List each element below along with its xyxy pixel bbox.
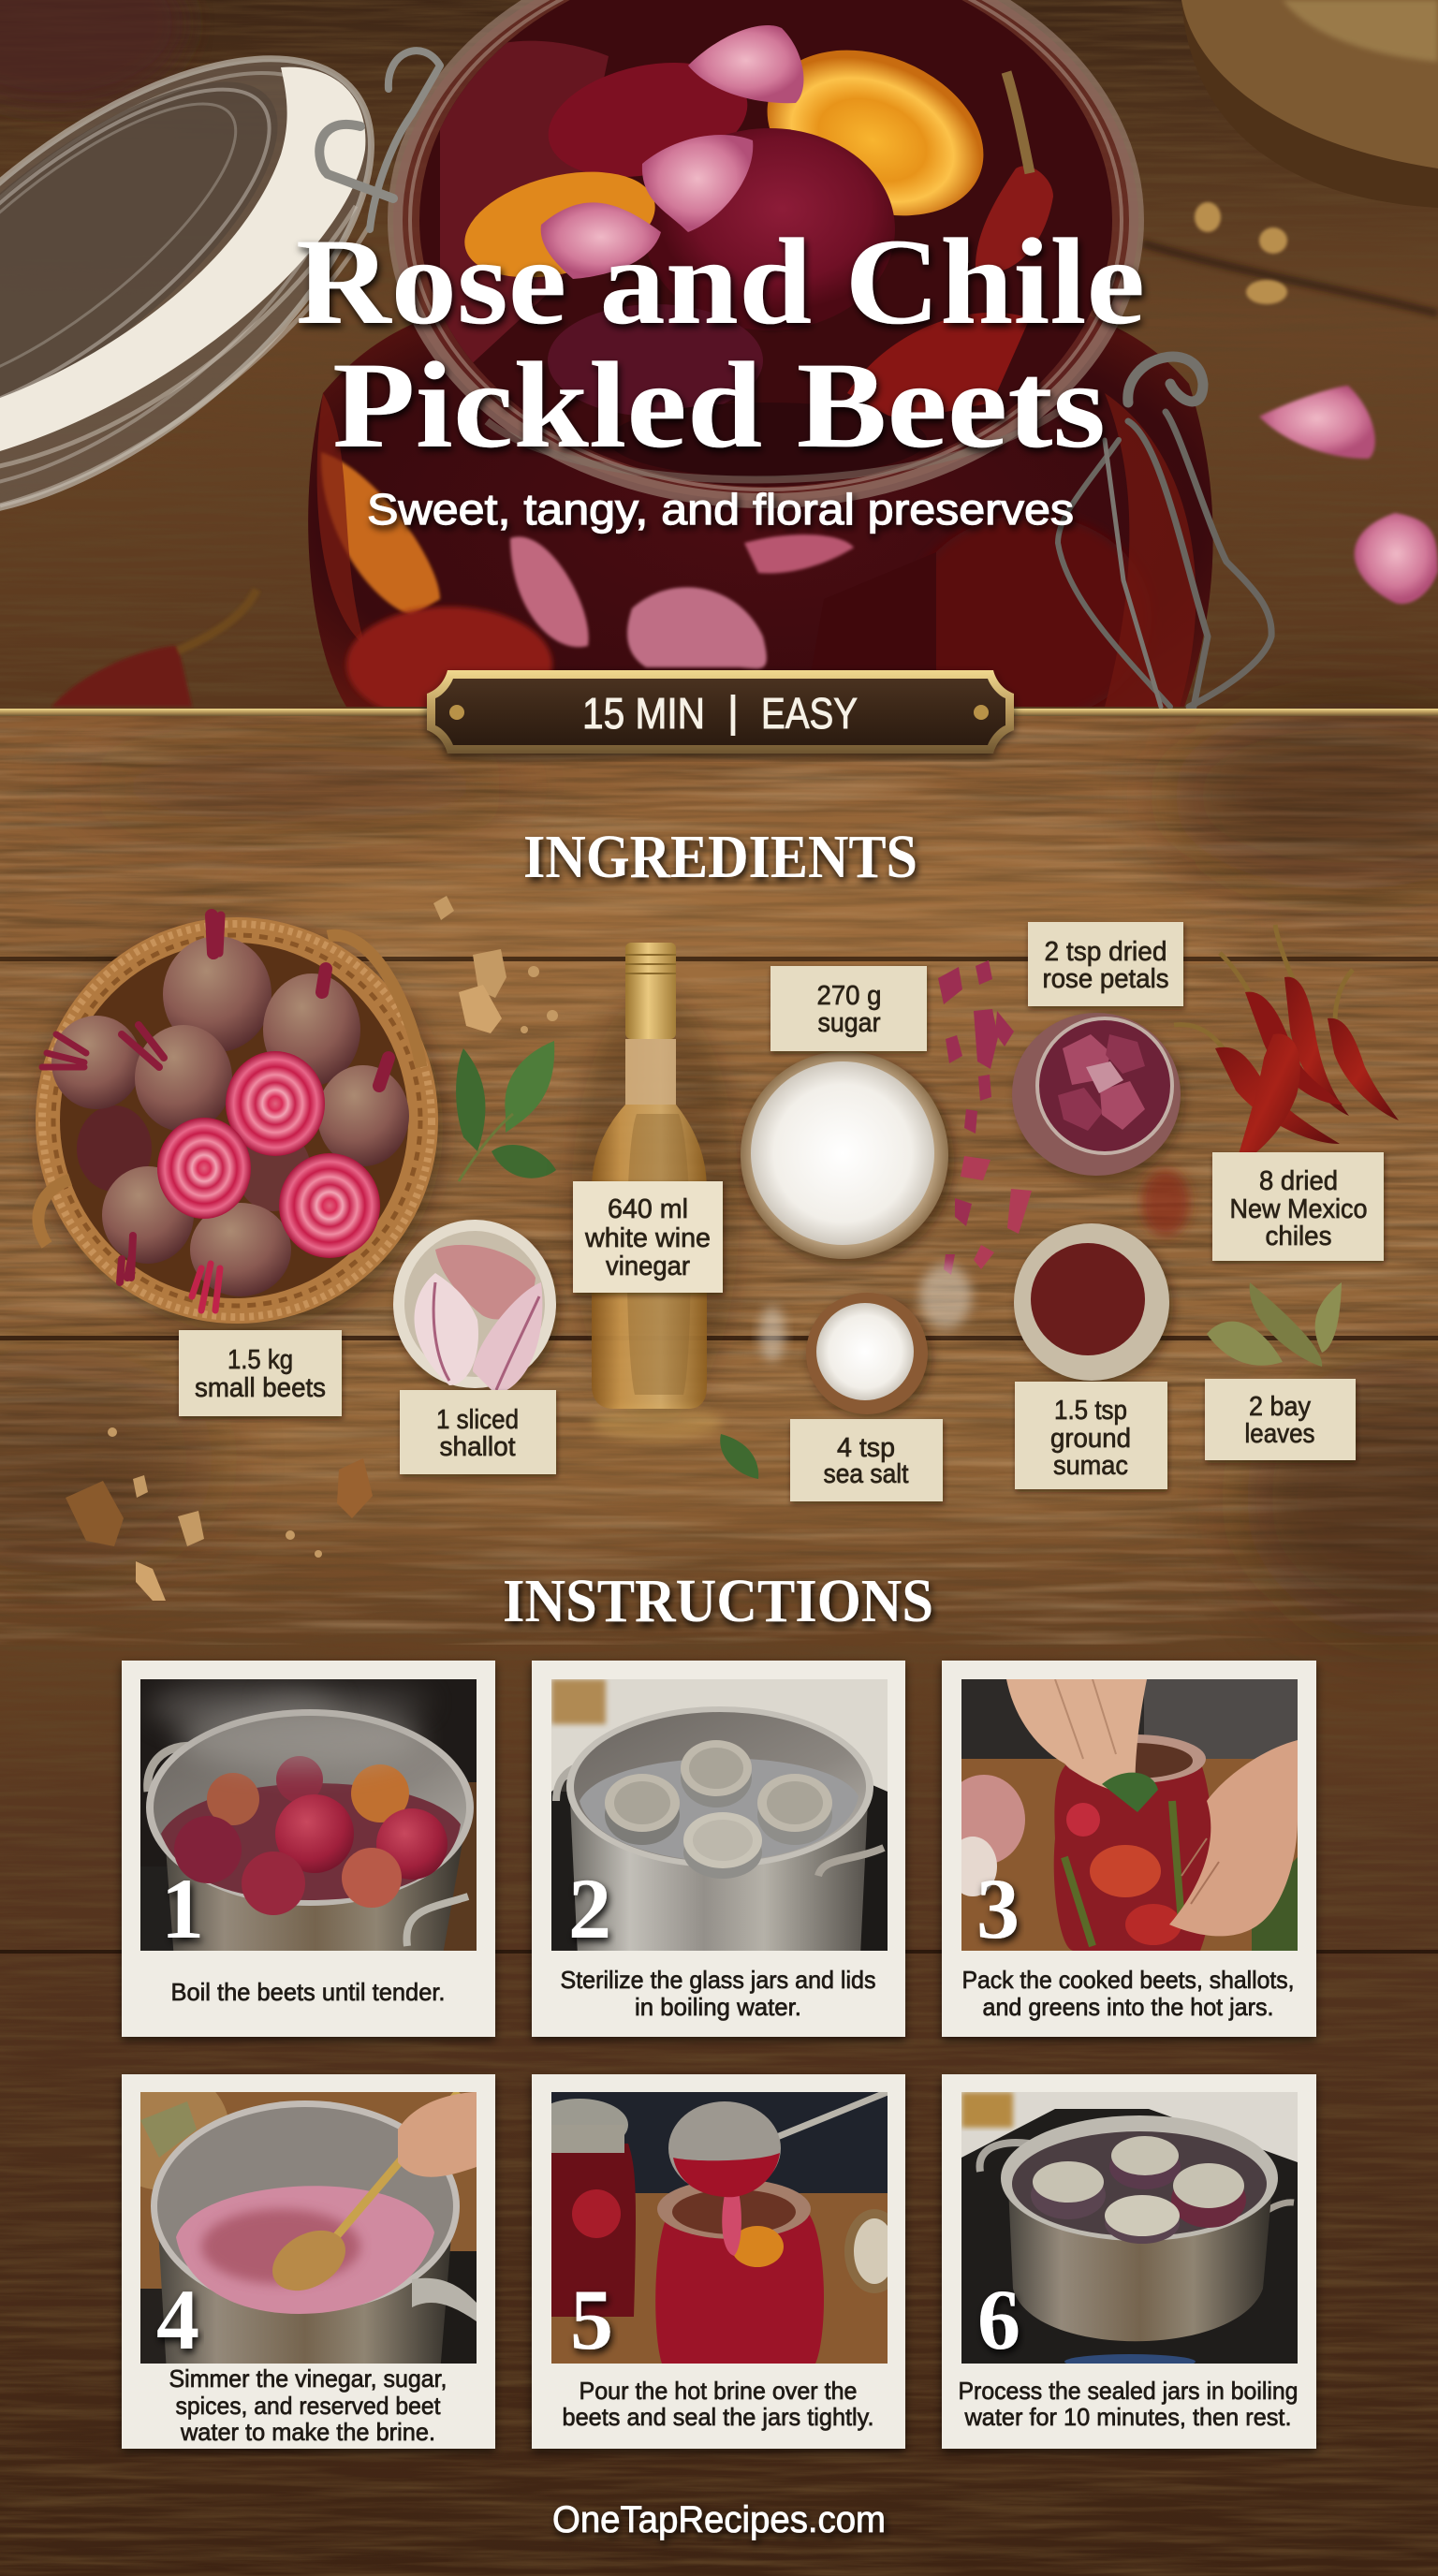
step 2 caption: in boiling water.	[635, 1993, 801, 2021]
title	[296, 212, 1145, 474]
subtitle: Sweet, tangy, and floral preserves	[367, 485, 1074, 534]
stems	[42, 915, 389, 1310]
step 6 card	[942, 2074, 1316, 2449]
label: 2 bay leaves	[1205, 1379, 1356, 1460]
jar neck and contents	[393, 0, 1138, 501]
orange beet slice	[454, 154, 666, 296]
label: 1.5 tsp ground sumac: ground	[1050, 1424, 1131, 1454]
label: 1.5 kg small beets: 1.5 kg	[227, 1345, 293, 1375]
step 2 card	[532, 1661, 905, 2037]
label: 1.5 tsp ground sumac: sumac	[1053, 1451, 1128, 1481]
step 6 number: 6	[977, 2272, 1020, 2367]
label: 1.5 tsp ground sumac	[1015, 1382, 1167, 1489]
plaque: time and difficulty: |	[727, 687, 739, 736]
bowl of chickpeas	[1181, 0, 1438, 208]
label: 8 dried New Mexico chiles: chiles	[1266, 1222, 1331, 1251]
sea salt bowl	[806, 1293, 932, 1419]
step 3 caption: and greens into the hot jars.	[983, 1993, 1273, 2021]
step 5 card	[531, 2074, 905, 2449]
step 4 number: 4	[156, 2272, 199, 2367]
step 4 card	[98, 2069, 495, 2449]
green leaves	[456, 1041, 556, 1181]
step 5 image: pouring brine	[531, 2092, 904, 2364]
step 4 caption: spices, and reserved beet	[176, 2392, 441, 2420]
label: 640 ml white wine vinegar: 640 ml	[608, 1194, 688, 1224]
title: Rose and Chile	[296, 212, 1145, 350]
step 4 caption: water to make the brine.	[180, 2418, 435, 2446]
step 4 image: simmering brine	[98, 2069, 477, 2373]
heading: instructions: INSTRUCTIONS	[503, 1567, 933, 1635]
basket of beets	[36, 915, 443, 1332]
hand right	[1169, 1740, 1298, 1936]
plaque: time and difficulty: 15 MIN	[582, 689, 705, 738]
step 1 caption: Boil the beets until tender.	[170, 1978, 446, 2006]
crumbs	[66, 896, 558, 1601]
gold divider	[0, 709, 1438, 716]
top-left blurred cloth	[0, 0, 187, 108]
label: 1 sliced shallot: 1 sliced	[436, 1405, 519, 1435]
rose petal left	[541, 202, 661, 279]
beets	[77, 1105, 152, 1192]
step 5 caption: Pour the hot brine over the	[579, 2377, 858, 2405]
step 2 image: sterilizing jars	[551, 1679, 888, 1955]
label: 640 ml white wine vinegar: vinegar	[606, 1251, 690, 1281]
label: 8 dried New Mexico chiles: 8 dried	[1259, 1166, 1338, 1196]
step 2 caption	[560, 1966, 876, 2021]
step 1 card	[122, 1661, 495, 2037]
bay leaves	[1207, 1282, 1342, 1367]
ingredients illustration	[36, 896, 1399, 1601]
label: 640 ml white wine vinegar	[573, 1181, 723, 1293]
step 6 caption: Process the sealed jars in boiling	[959, 2377, 1298, 2405]
step 3 caption: Pack the cooked beets, shallots,	[962, 1966, 1294, 1994]
lid	[844, 2209, 904, 2293]
label: 1.5 kg small beets: small beets	[195, 1373, 326, 1403]
dark beet slice	[549, 63, 747, 177]
footer: website: OneTapRecipes.com	[552, 2499, 886, 2540]
title: Pickled Beets	[332, 336, 1106, 474]
step 2 caption: Sterilize the glass jars and lids	[560, 1966, 876, 1994]
dried chiles	[1174, 925, 1399, 1170]
label: 1.5 tsp ground sumac: 1.5 tsp	[1054, 1396, 1127, 1426]
sugar bowl	[741, 1051, 954, 1266]
step 1 image: boiling beets	[140, 1679, 477, 1960]
label: 270 g sugar: sugar	[818, 1008, 881, 1038]
label: 2 tsp dried rose petals: 2 tsp dried	[1045, 937, 1167, 967]
big dark beet	[644, 128, 895, 330]
label: 4 tsp sea salt	[790, 1419, 943, 1501]
glass lid with white gasket	[0, 0, 448, 599]
step 4 caption	[169, 2364, 448, 2446]
step 4 caption: Simmer the vinegar, sugar,	[169, 2364, 448, 2393]
label: 8 dried New Mexico chiles: New Mexico	[1230, 1194, 1367, 1224]
label: 2 bay leaves: 2 bay	[1249, 1392, 1311, 1422]
step 6 caption: water for 10 minutes, then rest.	[964, 2403, 1292, 2431]
lower beets	[548, 304, 763, 417]
step 3 card	[942, 1661, 1316, 2037]
label: 8 dried New Mexico chiles	[1212, 1152, 1384, 1261]
step 3 caption	[962, 1966, 1294, 2021]
dried chile bottom-left	[51, 590, 257, 707]
step 5 caption: beets and seal the jars tightly.	[562, 2403, 874, 2431]
ladle	[772, 2092, 888, 2139]
label: 4 tsp sea salt: 4 tsp	[837, 1433, 895, 1463]
plaque: time and difficulty	[427, 670, 1014, 754]
label: 4 tsp sea salt: sea salt	[824, 1459, 908, 1489]
scattered salt	[759, 1264, 972, 1362]
label: 1 sliced shallot	[400, 1390, 556, 1474]
rose petal top	[688, 25, 803, 103]
rose petal center	[642, 135, 753, 232]
hand left	[1006, 1679, 1147, 1793]
jar body	[308, 316, 1213, 707]
hero wood crack	[1142, 243, 1438, 314]
step 6 image: water bath canning	[961, 2092, 1298, 2369]
left jar	[551, 2144, 636, 2317]
small leaf	[720, 1434, 758, 1479]
step 2 number: 2	[568, 1861, 611, 1956]
heading: ingredients: INGREDIENTS	[523, 823, 917, 891]
center jar	[655, 2214, 824, 2364]
golden beet slice	[742, 20, 1008, 246]
label: 640 ml white wine vinegar: white wine	[584, 1223, 711, 1253]
plaque: time and difficulty: EASY	[761, 689, 858, 738]
loose rose petals	[1259, 386, 1438, 604]
wire clasps	[319, 51, 1271, 707]
step 5 caption	[562, 2377, 874, 2431]
seeds	[1195, 202, 1287, 304]
step 5 number: 5	[570, 2272, 613, 2367]
sumac bowl	[1014, 1223, 1173, 1385]
jar of dried rose petals	[1012, 1013, 1184, 1183]
hero image: jar of pickled beets	[0, 0, 1438, 723]
label: 1 sliced shallot: shallot	[440, 1432, 515, 1462]
step 3 number: 3	[976, 1861, 1020, 1956]
label: 1.5 kg small beets	[179, 1330, 342, 1416]
label: 2 tsp dried rose petals	[1028, 922, 1183, 1006]
step 6 caption	[959, 2377, 1298, 2431]
vinegar bottle	[571, 943, 740, 1440]
label: 2 bay leaves: leaves	[1245, 1419, 1314, 1449]
label: 270 g sugar: 270 g	[816, 981, 882, 1011]
step 3 image: packing jar	[943, 1679, 1298, 1951]
chile in jar	[976, 166, 1053, 273]
label: 270 g sugar	[770, 966, 927, 1051]
step 1 number: 1	[161, 1861, 204, 1956]
scattered rose petals	[938, 960, 1032, 1275]
label: 2 tsp dried rose petals: rose petals	[1043, 964, 1168, 994]
shallot bowl	[393, 1220, 560, 1395]
